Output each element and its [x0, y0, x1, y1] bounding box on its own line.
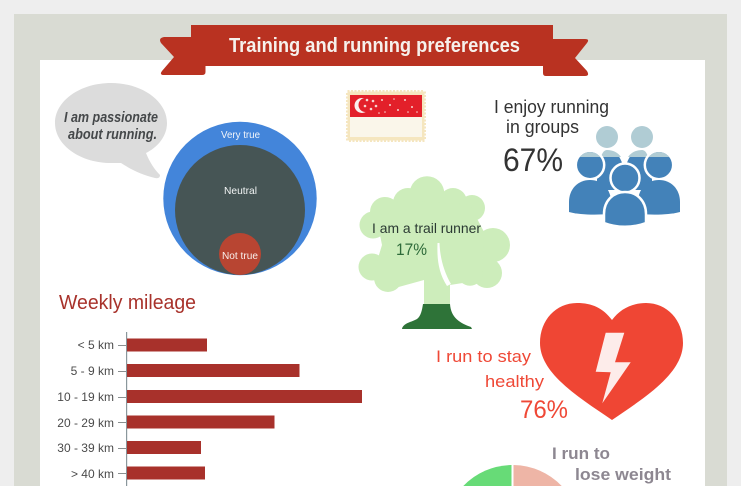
title banner: Training and running preferences: [229, 35, 520, 57]
text: I run to lose weight: lose weight: [575, 465, 671, 484]
bar chart: weekly mileage: 20 - 29 km: [57, 416, 114, 430]
text: I enjoy running in groups 67%: [494, 97, 609, 178]
nested circles chart: passionate about running: Not true: [222, 250, 258, 262]
text: I run to lose weight: [552, 444, 671, 484]
speech bubble: passionate about running: [55, 83, 167, 178]
text: I enjoy running in groups 67%: 67%: [503, 142, 563, 178]
heading: Weekly mileage: Weekly mileage: [59, 292, 196, 314]
icon: heart with lightning bolt: [540, 303, 683, 420]
light upper portion: [580, 152, 670, 157]
title banner: [160, 25, 588, 76]
speech bubble: passionate about running: I am passionate: [64, 109, 158, 126]
icon: Singapore flag stamp: [348, 92, 424, 140]
bar chart: weekly mileage: < 5 km: [78, 338, 114, 352]
nested circles chart: passionate about running: Neutral: [224, 185, 257, 197]
nested circles chart: passionate about running: [163, 122, 317, 275]
text: I enjoy running in groups 67%: in groups: [506, 117, 579, 137]
tree crown: [358, 176, 510, 304]
bar chart: weekly mileage: 10 - 19 km: [57, 390, 114, 404]
icon: tree with 17% trail runner: 17%: [396, 240, 427, 259]
text: I run to stay healthy 76%: healthy: [485, 372, 545, 391]
text: I enjoy running in groups 67%: I enjoy running: [494, 97, 609, 117]
speech bubble: passionate about running: about running.: [68, 126, 157, 143]
bar chart: weekly mileage: [57, 332, 362, 486]
bar chart: weekly mileage: 30 - 39 km: [57, 441, 114, 455]
text: I run to lose weight: I run to: [552, 444, 610, 463]
text: I run to stay healthy 76%: I run to stay: [436, 347, 532, 366]
nested circles chart: passionate about running: Very true: [221, 129, 260, 141]
text: I run to stay healthy 76%: 76%: [520, 396, 568, 424]
icon: group of people: [569, 126, 680, 227]
tree trunk base: [402, 304, 472, 329]
pie chart: lose weight: [463, 465, 562, 486]
back row people: [596, 126, 653, 190]
bar chart: weekly mileage: 5 - 9 km: [71, 364, 114, 378]
text: I run to stay healthy 76%: [436, 347, 568, 424]
bar chart: weekly mileage: > 40 km: [71, 467, 114, 481]
front row people: [569, 151, 680, 227]
icon: tree with 17% trail runner: [358, 176, 510, 329]
icon: tree with 17% trail runner: I am a trail runner: [372, 220, 481, 236]
tree trunk slit: [437, 243, 451, 286]
